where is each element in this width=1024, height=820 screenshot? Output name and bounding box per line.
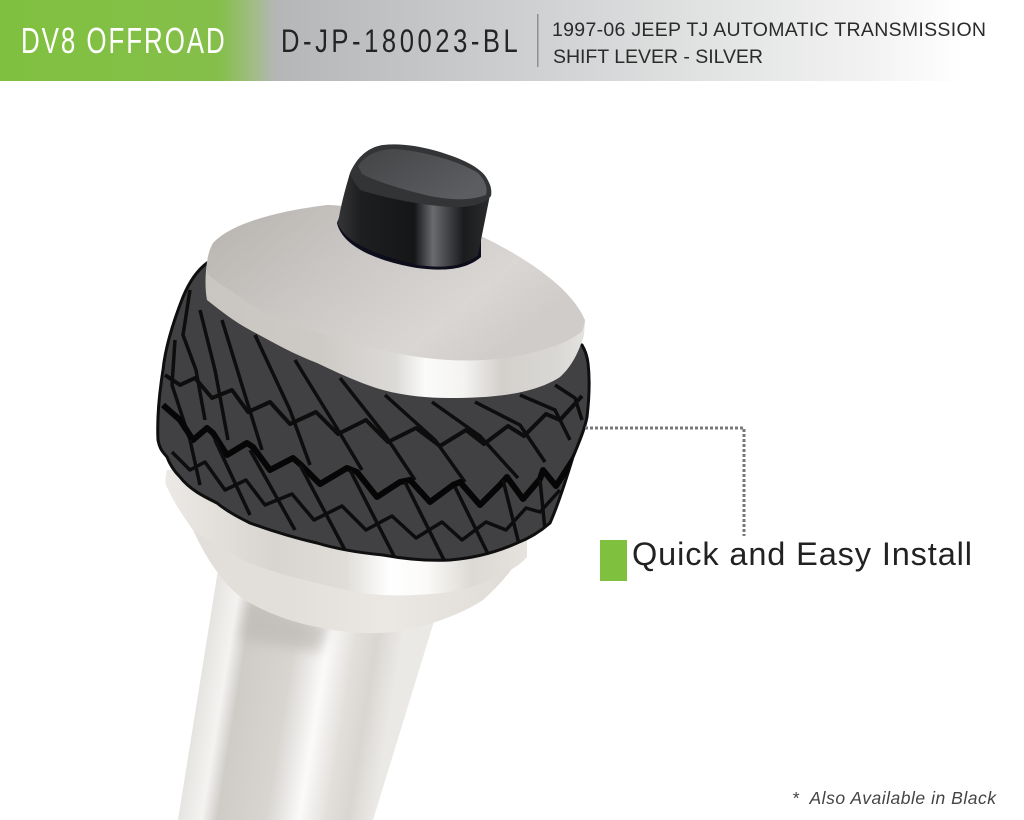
metal cap top face <box>207 205 585 361</box>
callout: quick and easy install <box>600 536 972 581</box>
tread: lower zigzag groove <box>172 452 560 540</box>
button shadow ring <box>337 215 481 270</box>
metal cap side band <box>206 262 585 398</box>
green marker <box>600 540 627 581</box>
tread: centre zigzag groove <box>163 405 576 505</box>
dotted leader line <box>585 428 744 536</box>
product title <box>552 19 986 68</box>
tread: diagonal grooves below centre <box>190 440 545 562</box>
product photo: shift knob <box>158 144 589 820</box>
lower collar <box>166 470 527 633</box>
product title: 1997-06 JEEP TJ AUTOMATIC TRANSMISSION <box>552 19 986 41</box>
push button <box>337 144 491 270</box>
footnote: * Also Available in Black <box>792 788 997 808</box>
callout text: Quick and Easy Install <box>632 536 972 572</box>
lever shaft <box>178 570 436 820</box>
part number: D-JP-180023-BL <box>281 24 518 60</box>
rubber tire grip <box>158 263 589 562</box>
button body <box>338 150 491 267</box>
header bar <box>0 0 1024 81</box>
header divider <box>537 14 538 67</box>
tread: upper zigzag groove <box>165 375 582 446</box>
brand name: DV8 OFFROAD <box>21 21 225 61</box>
product title: SHIFT LEVER - SILVER <box>553 46 763 68</box>
tread: diagonal grooves above centre <box>172 290 582 482</box>
button top face <box>358 149 487 199</box>
button top rim <box>350 144 491 207</box>
